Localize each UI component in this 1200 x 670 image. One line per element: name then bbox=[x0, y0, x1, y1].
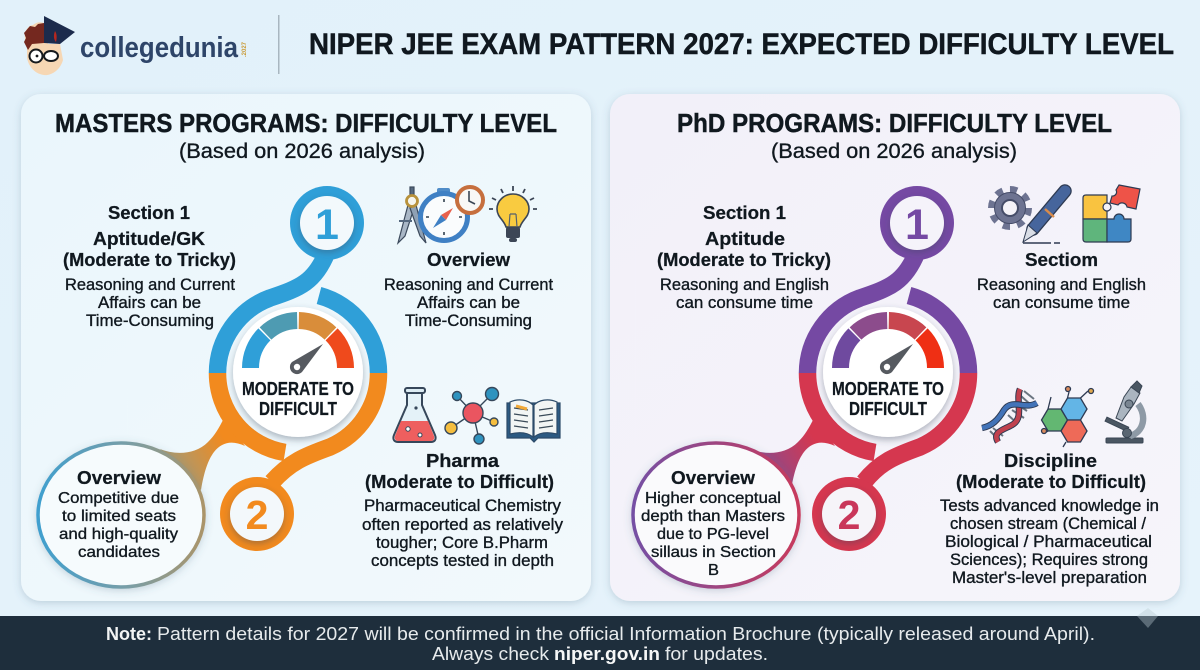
discipline text: Sciences); Requires strong bbox=[950, 551, 1148, 569]
overview bubble: to limited seats bbox=[62, 508, 176, 525]
gauge: DIFFICULT bbox=[849, 398, 928, 419]
masters heading: MASTERS PROGRAMS: DIFFICULTY LEVEL bbox=[55, 110, 557, 138]
pharma text: concepts tested in depth bbox=[371, 552, 554, 570]
icon: dna bbox=[982, 389, 1037, 442]
discipline text: Tests advanced knowledge in bbox=[940, 497, 1159, 515]
section text bbox=[977, 249, 1146, 312]
gauge label: MODERATE TO bbox=[832, 378, 944, 399]
section 1 text: Section 1 bbox=[703, 202, 786, 223]
pharma text: (Moderate to Difficult) bbox=[365, 471, 554, 492]
icon: pen bbox=[1023, 191, 1065, 243]
icon: hexagon molecule bbox=[1042, 386, 1094, 447]
overview bubble: B bbox=[708, 562, 719, 579]
section 1 text: can consume time bbox=[676, 294, 813, 312]
section 1 text bbox=[63, 202, 236, 330]
step 2 badge: 2 bbox=[246, 492, 268, 538]
section 1 text bbox=[657, 202, 831, 312]
overview bubble: Competitive due bbox=[58, 490, 179, 507]
panel: masters programs bbox=[21, 94, 591, 601]
phd subheading: (Based on 2026 analysis) bbox=[771, 140, 1017, 163]
overview bubble: Overview bbox=[77, 467, 162, 488]
step 2 badge bbox=[220, 477, 294, 551]
section 1 text: Aptitude/GK bbox=[93, 228, 206, 249]
step 1 badge bbox=[880, 186, 954, 260]
overview bubble bbox=[633, 443, 799, 587]
section 1 text: Affairs can be bbox=[98, 294, 201, 312]
section 1 text: Section 1 bbox=[108, 202, 190, 223]
pharma text bbox=[362, 450, 564, 570]
icon: open book bbox=[507, 400, 560, 442]
discipline text bbox=[940, 450, 1159, 587]
footer note bar: Always check bbox=[432, 644, 550, 664]
masters subheading: (Based on 2026 analysis) bbox=[179, 140, 425, 163]
phd heading: PhD PROGRAMS: DIFFICULTY LEVEL bbox=[677, 110, 1112, 138]
step 2 badge: 2 bbox=[838, 492, 860, 538]
logo: collegedunia: .2027 bbox=[241, 42, 248, 57]
icon: gear bbox=[992, 190, 1028, 226]
step 1 badge bbox=[290, 186, 364, 260]
section 1 text: (Moderate to Tricky) bbox=[657, 249, 831, 270]
step 2 badge bbox=[812, 477, 886, 551]
panel: phd programs bbox=[610, 94, 1180, 601]
connector to overview bubble bbox=[160, 418, 245, 490]
gauge: DIFFICULT bbox=[259, 398, 338, 419]
footer note bar: niper.gov.in bbox=[554, 644, 660, 664]
discipline text: Discipline bbox=[1004, 450, 1097, 471]
gauge bbox=[233, 307, 363, 437]
section text: Reasoning and English bbox=[977, 276, 1146, 294]
logo: collegedunia bbox=[24, 16, 248, 75]
section 1 text: Reasoning and Current bbox=[65, 276, 235, 294]
logo: collegedunia: collegedunia bbox=[80, 32, 239, 64]
connector to overview bubble bbox=[750, 418, 835, 490]
icon: puzzle bbox=[1083, 185, 1140, 242]
section 1 text: Time-Consuming bbox=[86, 312, 214, 330]
discipline text: chosen stream (Chemical / bbox=[950, 515, 1146, 533]
icon: microscope bbox=[1105, 381, 1143, 443]
discipline text: (Moderate to Difficult) bbox=[956, 471, 1146, 492]
gauge label: MODERATE TO bbox=[242, 378, 354, 399]
masters central diagram bbox=[160, 186, 379, 551]
overview bubble: Overview bbox=[671, 467, 756, 488]
overview text: Time-Consuming bbox=[405, 312, 532, 330]
section 1 text: Aptitude bbox=[705, 228, 785, 249]
icon: dividers bbox=[398, 187, 426, 243]
pharma text: Pharmaceutical Chemistry bbox=[364, 497, 562, 515]
discipline text: Master's-level preparation bbox=[952, 569, 1147, 587]
icon: molecule bbox=[445, 388, 498, 444]
footer note bar: Note: bbox=[106, 624, 152, 644]
discipline text: Biological / Pharmaceutical bbox=[945, 533, 1152, 551]
gauge bbox=[823, 307, 953, 437]
overview text: Overview bbox=[427, 249, 511, 270]
icon: compass bbox=[420, 188, 468, 240]
step 1 badge: 1 bbox=[315, 201, 339, 249]
footer note bar bbox=[0, 608, 1200, 670]
step 1 badge: 1 bbox=[905, 201, 929, 249]
overview bubble bbox=[38, 443, 204, 587]
phd central diagram bbox=[750, 186, 969, 551]
pharma text: tougher; Core B.Pharm bbox=[376, 534, 548, 552]
footer note bar: Pattern details for 2027 will be confirmed in the official Information Brochure (typically released around April). bbox=[157, 624, 1095, 644]
section text: Sectiom bbox=[1025, 249, 1098, 270]
overview bubble: candidates bbox=[78, 544, 160, 561]
overview bubble: due to PG-level bbox=[657, 526, 769, 543]
overview text bbox=[384, 249, 553, 330]
icon: light bulb bbox=[489, 186, 537, 242]
overview text: Affairs can be bbox=[417, 294, 520, 312]
section text: can consume time bbox=[993, 294, 1130, 312]
overview text: Reasoning and Current bbox=[384, 276, 553, 294]
overview bubble: sillaus in Section bbox=[651, 544, 776, 561]
overview bubble: depth than Masters bbox=[641, 508, 785, 525]
overview bubble: Higher conceptual bbox=[645, 490, 781, 507]
pharma text: often reported as relatively bbox=[362, 516, 564, 534]
icon: flask bbox=[393, 388, 436, 442]
footer note bar: for updates. bbox=[665, 644, 768, 664]
icon: clock bbox=[457, 187, 483, 213]
pharma text: Pharma bbox=[426, 450, 500, 471]
overview bubble: and high-quality bbox=[59, 526, 178, 543]
gauge needle bbox=[880, 344, 913, 374]
gauge needle bbox=[290, 344, 323, 374]
section 1 text: (Moderate to Tricky) bbox=[63, 249, 236, 270]
section 1 text: Reasoning and English bbox=[660, 276, 829, 294]
